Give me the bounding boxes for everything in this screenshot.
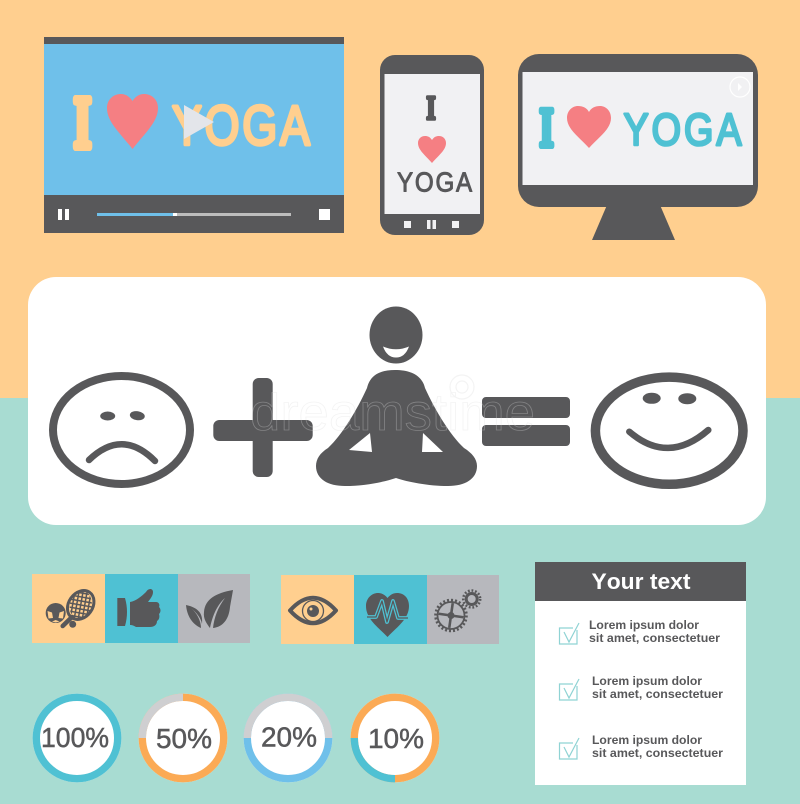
checklist item 2: Lorem ipsum dolor	[592, 674, 702, 688]
icon: monitor play badge	[730, 77, 750, 97]
icon: pause	[58, 209, 69, 220]
icon: happy face	[595, 377, 743, 484]
icon: eye	[290, 598, 336, 623]
icon: heart with pulse	[366, 593, 409, 637]
monitor	[518, 54, 758, 240]
icon: stop	[319, 209, 330, 220]
progress ring: 50%	[139, 694, 227, 782]
icon: phone heart	[418, 136, 446, 163]
video text: YOGA: YOGA	[172, 94, 313, 156]
phone buttons	[404, 220, 459, 229]
icon: video heart	[107, 94, 158, 149]
icon: plus	[213, 378, 313, 477]
icon row 2	[281, 575, 499, 644]
monitor text: I: I	[539, 98, 554, 159]
icon row 1	[32, 574, 250, 643]
progress ring: 20%	[244, 694, 332, 782]
icon: play triangle	[184, 105, 214, 139]
icon: leaves	[186, 590, 233, 628]
phone	[380, 55, 484, 235]
heading: Your text	[592, 569, 691, 594]
label: 10%: 10%	[368, 723, 424, 754]
icon: meditating figure	[316, 306, 477, 486]
checklist item 3: Lorem ipsum dolor	[592, 733, 702, 747]
progress ring: 10%	[351, 694, 439, 782]
icon: monitor heart	[567, 106, 611, 148]
phone text: YOGA: YOGA	[397, 168, 474, 198]
checklist item 1: sit amet, consectetuer	[589, 631, 720, 645]
watermark: dreamstime	[250, 384, 535, 442]
video player	[44, 37, 344, 233]
panel: equation	[28, 277, 766, 525]
progress ring: 100%	[33, 694, 121, 782]
label: 20%: 20%	[261, 722, 317, 752]
checklist item 3	[560, 733, 723, 760]
checklist item 2: sit amet, consectetuer	[592, 687, 723, 701]
monitor text: YOGA: YOGA	[624, 104, 744, 155]
icon: sad face	[53, 376, 190, 484]
checklist item 1	[560, 618, 720, 645]
background: orange top	[0, 0, 800, 398]
background: teal bottom	[0, 398, 800, 804]
label: 100%: 100%	[41, 722, 109, 753]
checklist item 3: sit amet, consectetuer	[592, 746, 723, 760]
icon: sports ball and racket	[46, 589, 96, 628]
video text: I: I	[74, 83, 91, 164]
panel header	[535, 562, 746, 601]
icon: gears	[436, 590, 480, 631]
panel: your text checklist	[535, 562, 746, 785]
label: 50%: 50%	[156, 723, 212, 754]
icon: thumbs up	[117, 589, 160, 627]
phone text: I: I	[426, 90, 436, 127]
progress bar	[97, 213, 291, 216]
checklist item 2	[560, 674, 723, 701]
icon: equals	[482, 397, 570, 446]
checklist item 1: Lorem ipsum dolor	[589, 618, 699, 632]
